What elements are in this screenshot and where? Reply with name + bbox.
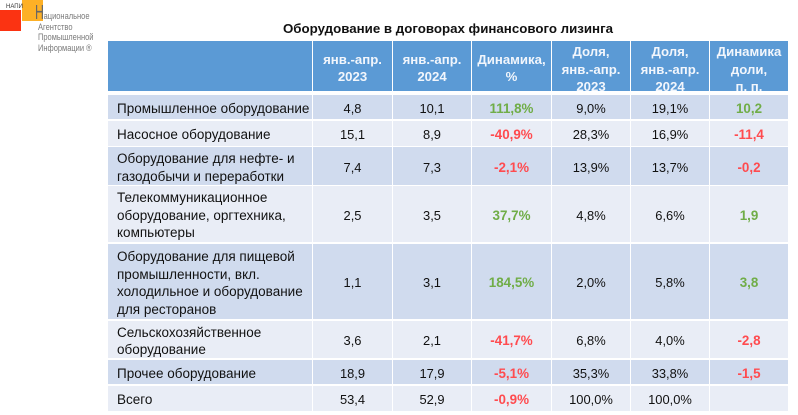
table header row: % [506,68,517,84]
row: промышленное оборудование [108,95,788,119]
row: промышленное оборудование: 111,8% [490,101,533,116]
row: насосное оборудование: -11,4 [734,127,764,142]
table header row: янв.-апр. [641,62,699,77]
row: пищевая промышленность: 3,8 [740,275,758,290]
row: пищевая промышленность: для ресторанов [117,302,216,316]
table header row: 2024 [417,68,447,84]
row: пищевая промышленность [108,244,788,319]
row: телекоммуникационное оборудование: 2,5 [344,208,361,223]
row: насосное оборудование: 16,9% [652,127,688,142]
row: промышленное оборудование: 10,2 [736,101,762,116]
row: пищевая промышленность: 2,0% [576,275,606,290]
table header row: Доля, [651,44,689,59]
logo text: ациональное [44,10,90,21]
row: телекоммуникационное оборудование: 4,8% [576,208,606,223]
logo orange square [22,0,43,21]
row: нефте- и газодобыча: 7,4 [344,160,361,175]
row: пищевая промышленность: Оборудование для пищевой [117,249,295,264]
row: телекоммуникационное оборудование: оборудование, оргтехника, [117,208,286,223]
row: всего: 52,9 [419,392,445,407]
row: сельскохозяйственное оборудование: -41,7% [490,333,533,348]
row: сельскохозяйственное оборудование: 4,0% [655,333,685,348]
row: насосное оборудование: Насосное оборудование [117,127,270,142]
logo: НАПИ [0,0,94,53]
row: насосное оборудование: 28,3% [573,127,609,142]
row: промышленное оборудование: 10,1 [419,101,445,116]
row: нефте- и газодобыча: -0,2 [737,160,761,175]
logo red square [0,10,21,31]
row: сельскохозяйственное оборудование: 3,6 [344,333,361,348]
row: прочее оборудование: Прочее оборудование [117,366,256,381]
table header row [108,41,788,94]
row: нефте- и газодобыча: газодобычи и переработки [117,168,284,184]
row: сельскохозяйственное оборудование: Сельскохозяйственное [117,324,261,340]
row: прочее оборудование: 17,9 [419,366,445,381]
logo text: Промышленной [38,31,94,42]
row: прочее оборудование: 33,8% [652,366,688,381]
row: прочее оборудование [108,360,788,384]
row: телекоммуникационное оборудование: 1,9 [740,208,758,223]
table header row: 2023 [338,68,367,84]
row: промышленное оборудование: 4,8 [344,101,361,116]
table header row: янв.-апр. [562,62,620,77]
table: equipment in leasing contracts [108,41,788,411]
row: прочее оборудование: -5,1% [494,366,529,381]
row: сельскохозяйственное оборудование [108,321,788,358]
table header row: 2024 [655,79,685,94]
row: насосное оборудование: -40,9% [490,127,533,142]
row: телекоммуникационное оборудование: Телекоммуникационное [117,190,267,205]
row: прочее оборудование: -1,5 [737,366,761,381]
row: пищевая промышленность: холодильное и оборудование [117,284,303,299]
row: телекоммуникационное оборудование: 3,5 [423,208,441,223]
row: всего: Всего [117,392,152,407]
logo small label: НАПИ [6,4,23,10]
row: насосное оборудование: 8,9 [423,127,441,142]
row: пищевая промышленность: 5,8% [655,275,685,290]
table header row: доли, [731,62,767,77]
row: всего: -0,9% [494,392,529,407]
table header row: Динамика, [477,52,546,66]
table header row: Динамика [717,44,781,59]
row: всего: 53,4 [340,392,365,407]
row: нефте- и газодобыча: 13,7% [652,160,688,175]
row: нефте- и газодобыча: Оборудование для нефте- и [117,151,294,166]
row: прочее оборудование: 18,9 [340,366,365,381]
row: прочее оборудование: 35,3% [573,366,609,381]
row: пищевая промышленность: 3,1 [423,275,441,290]
row: всего [108,386,788,411]
row: сельскохозяйственное оборудование: -2,8 [737,333,761,348]
logo text: Агентство [38,20,72,32]
row: сельскохозяйственное оборудование: оборудование [117,342,206,357]
row: пищевая промышленность: 184,5% [489,275,534,290]
row: нефте- и газодобыча [108,147,788,185]
row: нефте- и газодобыча: 13,9% [573,160,609,175]
row: пищевая промышленность: 1,1 [344,275,361,290]
row: сельскохозяйственное оборудование: 6,8% [576,333,606,348]
row: всего: 100,0% [569,392,613,407]
row: всего: 100,0% [648,392,692,407]
table header row: янв.-апр. [403,52,461,66]
row: нефте- и газодобыча: 7,3 [423,160,441,175]
row: телекоммуникационное оборудование [108,186,788,242]
table header row: 2023 [576,79,606,94]
row: насосное оборудование: 15,1 [340,127,365,142]
table header row: п. п. [736,79,762,94]
row: промышленное оборудование: 9,0% [576,101,606,116]
table header row: Доля, [572,44,610,59]
title: Оборудование в договорах финансового лизинга [283,21,613,36]
row: нефте- и газодобыча: -2,1% [494,160,529,175]
row: насосное оборудование [108,121,788,146]
logo letter: Н [35,2,44,24]
row: пищевая промышленность: промышленности, вкл. [117,266,260,282]
logo text [38,10,94,53]
row: сельскохозяйственное оборудование: 2,1 [423,333,441,348]
row: промышленное оборудование: 19,1% [652,101,688,116]
table header row: янв.-апр. [323,52,382,66]
logo text: Информации ® [38,42,92,52]
row: телекоммуникационное оборудование: компьютеры [117,225,195,240]
row: промышленное оборудование: Промышленное оборудование [117,101,309,116]
row: телекоммуникационное оборудование: 37,7% [493,208,530,223]
row: телекоммуникационное оборудование: 6,6% [655,208,685,223]
